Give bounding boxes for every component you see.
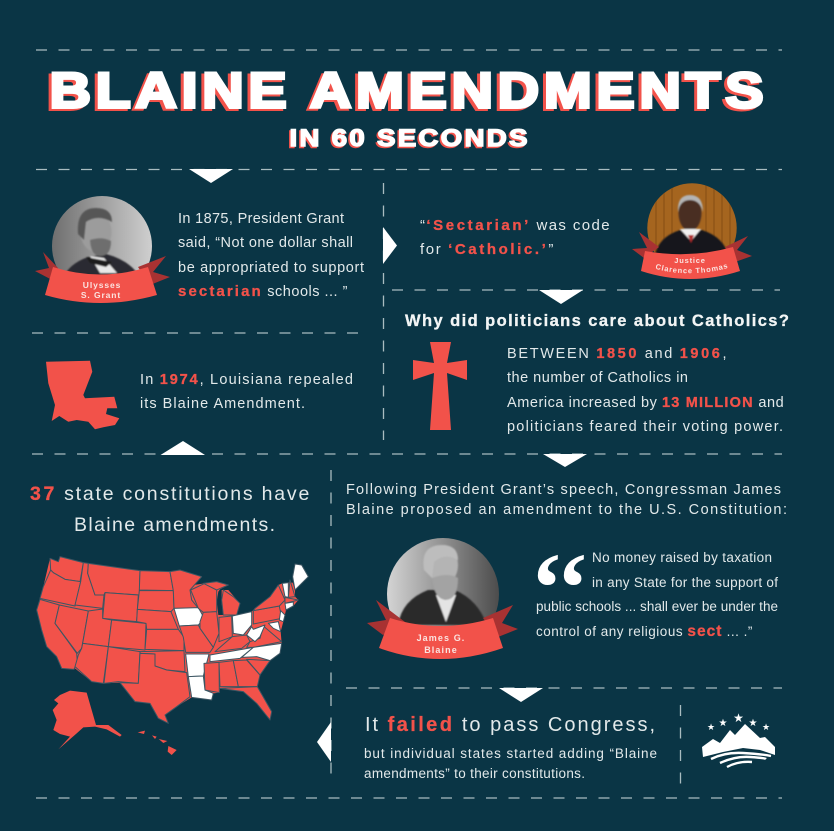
text: Grant quote: said, “Not one dollar shall [178,235,353,251]
text: sectarian code quote: “‘Sectarian’ was code [420,217,611,234]
text: Grant quote: sectarian schools ... ” [178,283,348,300]
text: Grant quote: be appropriated to support [178,260,364,276]
ribbon: Grant: Ulysses [83,280,121,290]
ribbon: Grant [35,252,170,303]
ribbon: Grant: S. Grant [81,290,121,300]
text: amendment quote: No money raised by taxation [592,550,772,565]
arrow: left to map [317,722,331,762]
arrow: down from title [189,169,233,183]
text: failed outcome [364,714,657,781]
ribbon: Thomas [632,232,752,279]
text: failed outcome: but individual states started adding “Blaine [364,746,657,761]
text: sectarian code quote [420,217,611,258]
heading: 37 state constitutions [30,483,311,536]
text: Blaine proposal: Following President Grant’s speech, Congressman James [346,482,781,498]
ribbon: Thomas: Justice [674,256,706,265]
portrait photo: Thomas [647,183,737,254]
icon: logo mountains and stars: ★ [762,722,770,732]
text: Blaine proposal: Blaine proposed an amendment to the U.S. Constitution: [346,502,787,518]
text: Grant quote: In 1875, President Grant [178,211,344,227]
ribbon: Blaine: Blaine [424,645,458,655]
text: Catholic population: America increased by 13 MILLION and [507,395,784,411]
text: Louisiana repeal: its Blaine Amendment. [140,396,305,412]
arrow: right [383,227,397,264]
panel: Thomas portrait [632,183,752,279]
icon: quotation mark [530,532,589,643]
text: failed outcome: amendments” to their constitutions. [364,766,585,781]
icon: cross [413,342,467,430]
icon: logo mountains and stars: ★ [749,718,758,729]
icon: logo mountains and stars: ★ [707,722,715,732]
text: amendment quote: control of any religious sect ... .” [536,623,753,640]
icon: logo mountains and stars: ★ [719,718,728,729]
text: sectarian code quote: for ‘Catholic.’” [420,241,555,258]
portrait photo: Blaine [387,538,499,626]
text: Catholic population: politicians feared their voting power. [507,419,783,435]
text: Catholic population [507,346,784,435]
arrow: down to outcome [499,688,543,702]
ribbon: Blaine [367,600,518,659]
heading: 37 state constitutions: 37 state constitutions have [30,483,311,505]
text: Catholic population: the number of Catholics in [507,370,688,386]
text: Blaine proposal [346,482,787,518]
portrait photo: Grant [52,196,152,274]
arrow: down to politicians section [539,290,583,304]
title: BLAINE AMENDMENTS [46,65,761,121]
ribbon: Thomas: Clarence Thomas [656,264,728,274]
text: Louisiana repeal: In 1974, Louisiana repealed [140,372,354,388]
icon: logo mountains and stars: ★ [733,711,744,725]
arrow: up to Louisiana [160,441,205,455]
text: amendment quote [536,550,778,640]
icon: logo mountains and stars [702,711,775,767]
text: Catholic population: BETWEEN 1850 and 1906, [507,346,728,362]
panel: Grant portrait [35,196,170,303]
icon: quotation mark: ‘ [530,532,563,643]
text: Grant quote [178,211,364,300]
heading: why politicians cared: Why did politicians care about Catholics? [405,312,789,330]
subtitle: IN 60 SECONDS [290,126,528,152]
text: failed outcome: It failed to pass Congress, [365,714,657,736]
map: US states with Blaine amendments [37,557,308,755]
icon: Louisiana [46,361,119,429]
subtitle: IN 60 SECONDS [288,127,526,153]
heading: 37 state constitutions: Blaine amendments. [74,514,275,536]
text: amendment quote: in any State for the support of [592,575,778,590]
title: BLAINE AMENDMENTS [50,63,764,119]
text: amendment quote: public schools ... shall ever be under the [536,599,778,614]
ribbon: Blaine: James G. [417,633,465,643]
icon: quotation mark: ‘ [556,532,589,643]
text: Louisiana repeal [140,372,354,412]
arrow: down from politicians section [543,454,587,467]
panel: Blaine portrait [367,538,518,659]
